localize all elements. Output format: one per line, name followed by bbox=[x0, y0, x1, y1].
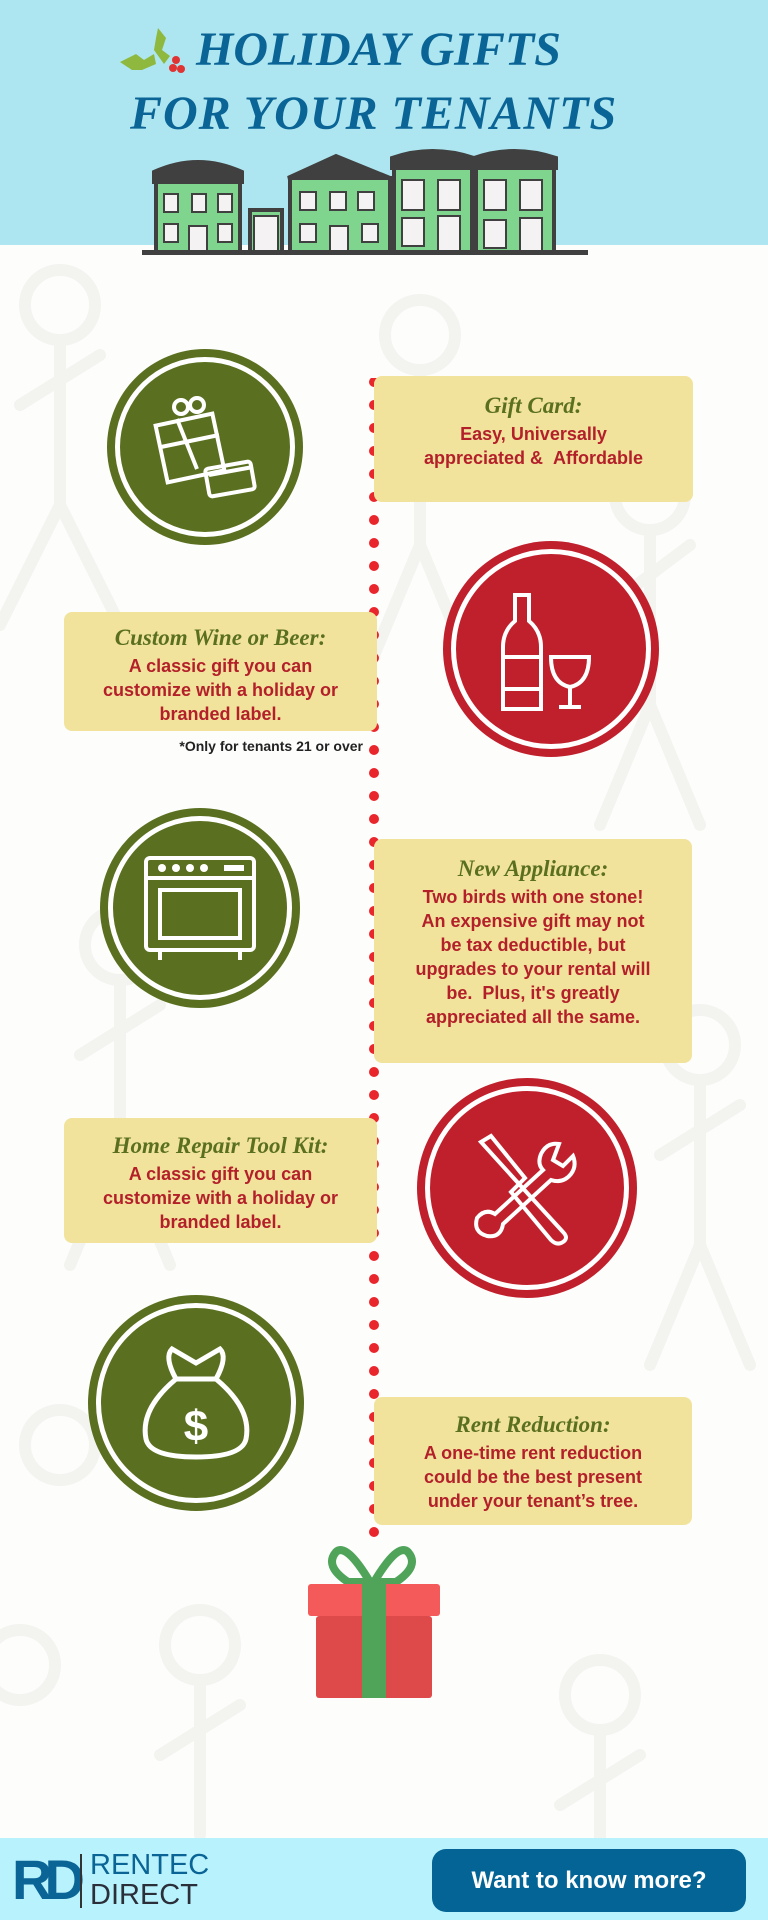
title: FOR YOUR TENANTS bbox=[130, 87, 617, 140]
box: new appliance: New Appliance: bbox=[458, 856, 608, 881]
box: new appliance: An expensive gift may not bbox=[421, 911, 645, 931]
button: want to know more: Want to know more? bbox=[471, 1867, 707, 1894]
box: custom wine or beer: Custom Wine or Beer: bbox=[115, 625, 326, 650]
note: age: *Only for tenants 21 or over bbox=[179, 738, 363, 754]
box: gift card bbox=[374, 376, 693, 502]
title: HOLIDAY GIFTS bbox=[196, 23, 561, 76]
circle: money bag icon: $ bbox=[184, 1402, 208, 1451]
box: gift card: Gift Card: bbox=[485, 393, 582, 418]
box: gift card: appreciated & Affordable bbox=[424, 448, 643, 468]
logo: DIRECT bbox=[90, 1879, 198, 1911]
dotted timeline bbox=[369, 378, 379, 1537]
header band bbox=[0, 0, 768, 245]
box: new appliance: Two birds with one stone! bbox=[423, 887, 643, 907]
circle: gift card icon bbox=[107, 349, 303, 545]
box: custom wine or beer bbox=[64, 612, 377, 731]
box: rent reduction: under your tenant’s tree. bbox=[428, 1491, 638, 1511]
box: new appliance: be. Plus, it's greatly bbox=[446, 983, 620, 1003]
box: rent reduction bbox=[374, 1397, 692, 1525]
circle: wine icon bbox=[443, 541, 659, 757]
circle: tools icon bbox=[417, 1078, 637, 1298]
logo: RENTEC bbox=[90, 1849, 209, 1881]
box: custom wine or beer: A classic gift you can bbox=[129, 656, 312, 676]
box: new appliance: be tax deductible, but bbox=[440, 935, 626, 955]
box: home repair tool kit: customize with a holiday or bbox=[103, 1188, 338, 1208]
box: new appliance: upgrades to your rental will bbox=[415, 959, 651, 979]
icon: holly bbox=[120, 28, 185, 73]
box: new appliance: appreciated all the same. bbox=[426, 1007, 640, 1027]
box: rent reduction: Rent Reduction: bbox=[455, 1412, 611, 1437]
button: want to know more bbox=[432, 1849, 746, 1912]
box: home repair tool kit: A classic gift you can bbox=[129, 1164, 312, 1184]
box: custom wine or beer: branded label. bbox=[159, 704, 282, 724]
box: home repair tool kit: branded label. bbox=[159, 1212, 282, 1232]
footer bbox=[0, 1838, 768, 1920]
logo: RD bbox=[12, 1848, 77, 1911]
box: rent reduction: could be the best present bbox=[424, 1467, 642, 1487]
logo bbox=[12, 1848, 209, 1911]
houses illustration bbox=[142, 149, 588, 255]
title bbox=[130, 23, 617, 140]
box: rent reduction: A one-time rent reduction bbox=[424, 1443, 642, 1463]
box: gift card: Easy, Universally bbox=[460, 424, 607, 444]
box: home repair tool kit bbox=[64, 1118, 377, 1243]
box: home repair tool kit: Home Repair Tool Kit: bbox=[113, 1133, 328, 1158]
icon: gift box bbox=[308, 1546, 440, 1698]
circle: oven icon bbox=[100, 808, 300, 1008]
circle: money bag icon bbox=[88, 1295, 304, 1511]
box: custom wine or beer: customize with a holiday or bbox=[103, 680, 338, 700]
box: new appliance bbox=[374, 839, 692, 1063]
